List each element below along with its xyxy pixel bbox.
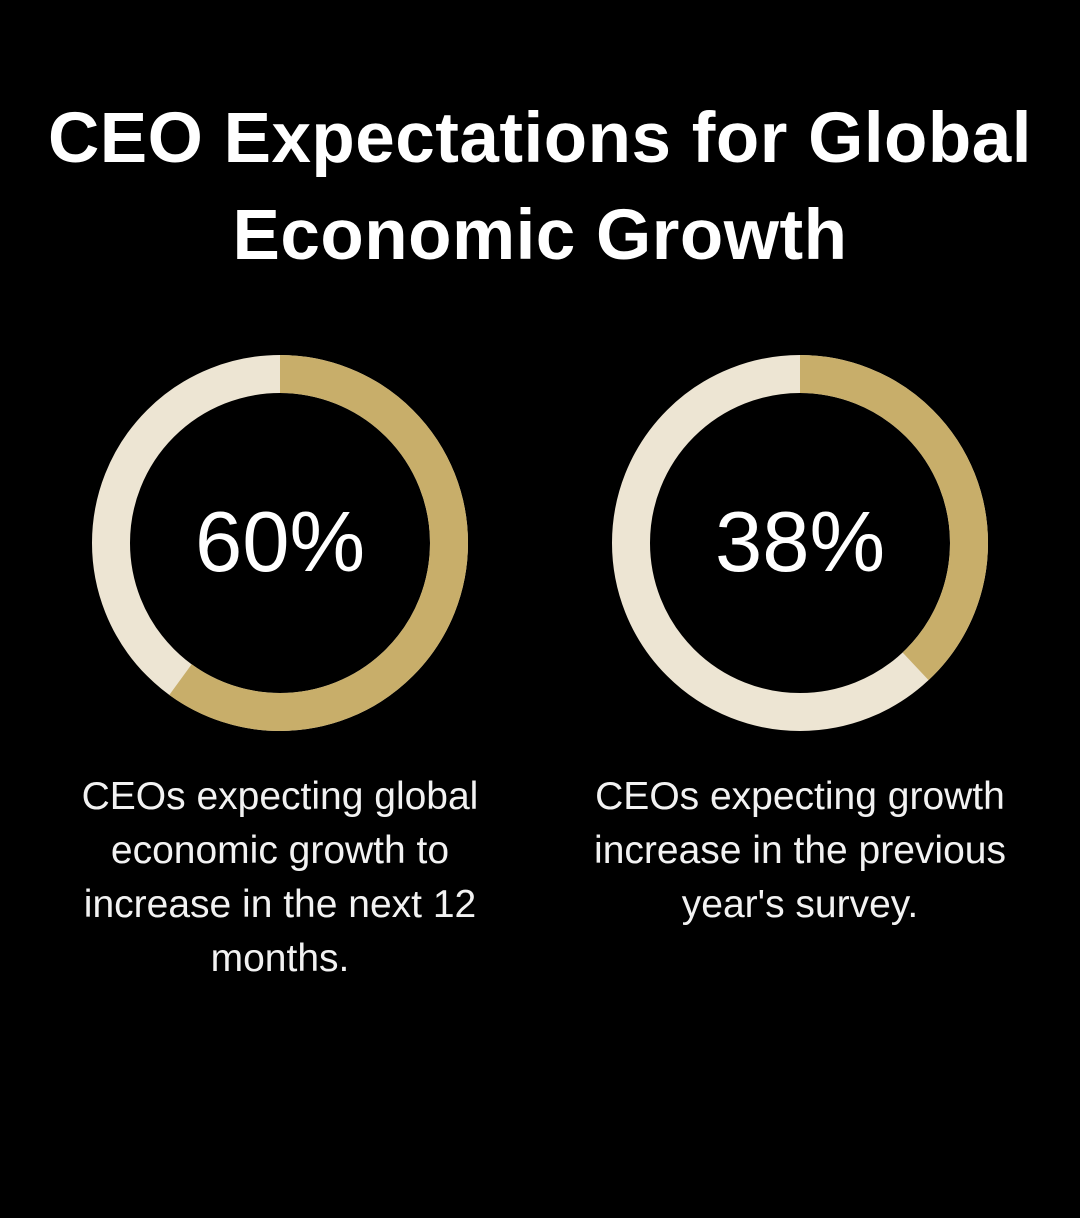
chart: donut 60% [92, 355, 468, 731]
chart: donut 38% [612, 355, 988, 731]
title [48, 99, 1032, 275]
chart: donut 60%: 60% [195, 495, 365, 590]
caption: right: CEOs expecting growth increase in the previous year's survey. [594, 775, 1006, 926]
title: Economic Growth [232, 196, 848, 275]
chart: donut 38%: 38% [715, 495, 885, 590]
title: CEO Expectations for Global [48, 99, 1032, 178]
caption: left: CEOs expecting global economic growth to increase in the next 12 months. [82, 775, 478, 980]
